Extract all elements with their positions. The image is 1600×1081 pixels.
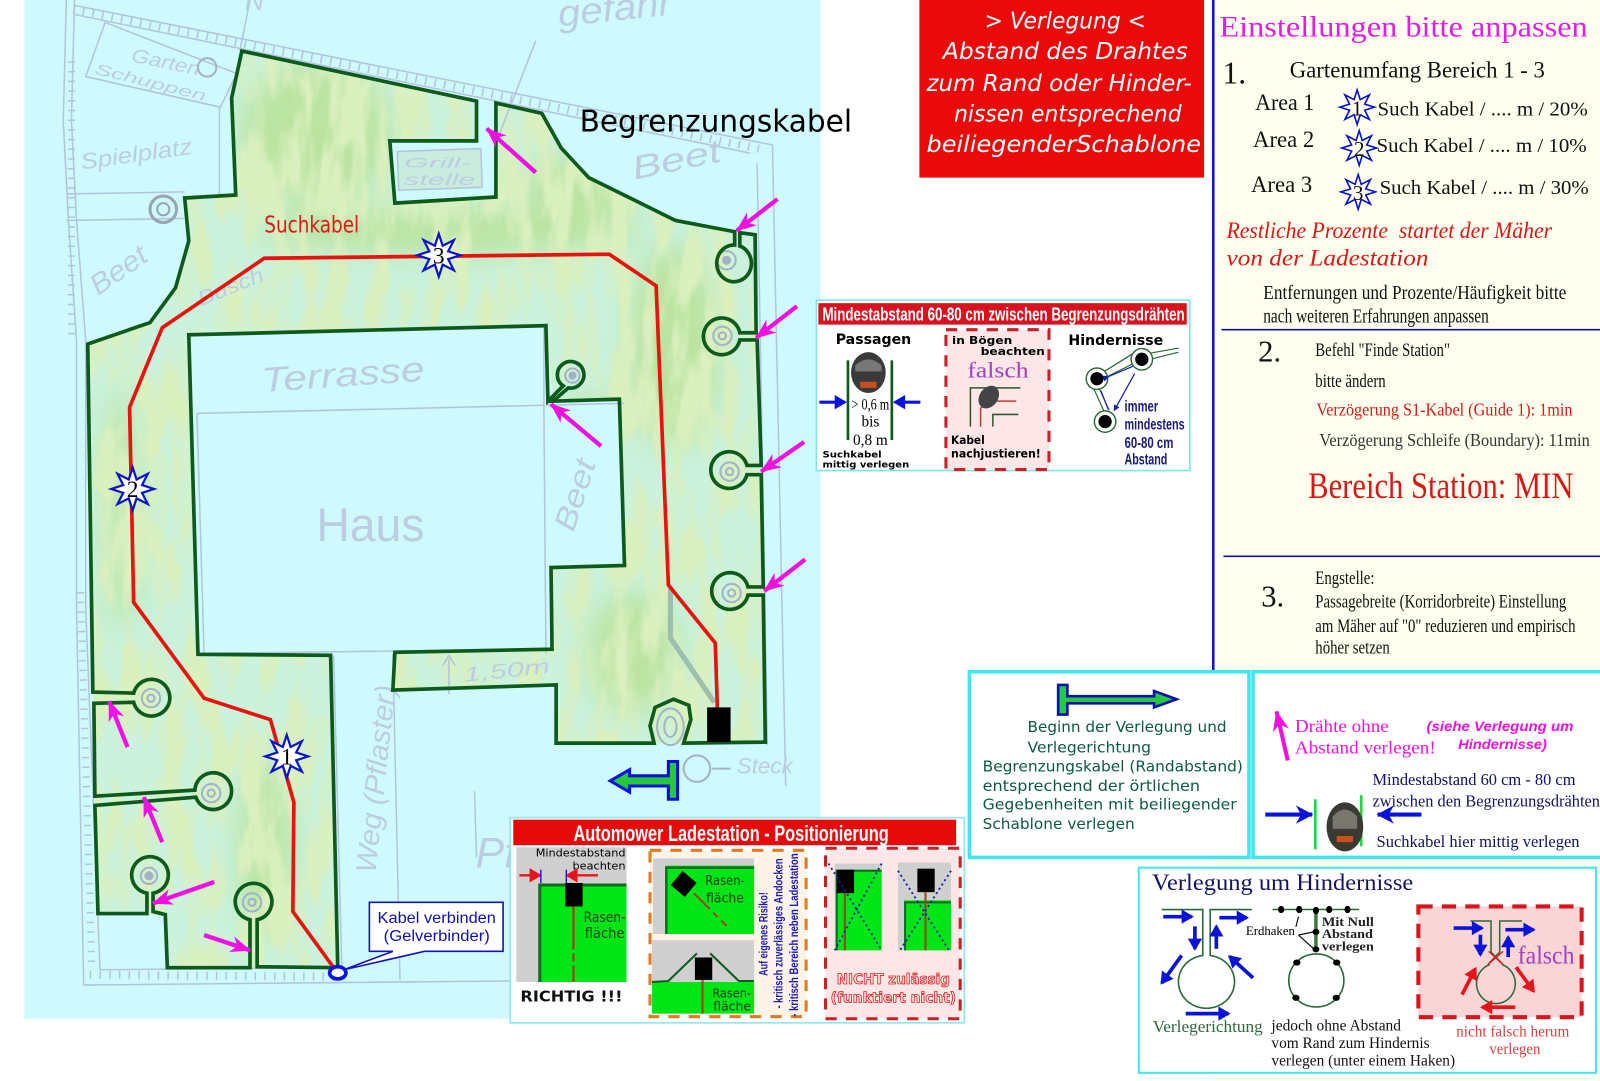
diagram: earth hooks: Mit Null bbox=[1322, 915, 1375, 929]
guide wire in grey bbox=[670, 588, 714, 702]
column: curves wrong bbox=[946, 330, 1049, 470]
instruction text: Verlegerichtung bbox=[1028, 739, 1151, 756]
callout: laying instructions red: beiliegenderSchablone bbox=[927, 130, 1201, 158]
step 1: Area 3 bbox=[1251, 172, 1312, 198]
pencil sketch lines bbox=[63, 0, 786, 985]
charging station bbox=[707, 707, 731, 742]
column: passages bbox=[819, 332, 920, 471]
instruction text: Begrenzungskabel (Randabstand) bbox=[983, 759, 1243, 776]
example: not allowed: (funktiert nicht) bbox=[831, 990, 956, 1006]
diagram: correct direction: Verlegerichtung bbox=[1153, 1017, 1263, 1036]
note: distances: nach weiteren Erfahrungen anpassen bbox=[1263, 306, 1489, 328]
diagram: correct direction bbox=[1153, 910, 1263, 1036]
diagram: wrong direction: nicht falsch herum bbox=[1456, 1024, 1569, 1041]
column: passages: mittig verlegen bbox=[822, 460, 909, 471]
title: settings: Einstellungen bitte anpassen bbox=[1219, 12, 1588, 44]
column: passages: Suchkabel bbox=[822, 449, 882, 460]
callout: laying instructions red: zum Rand oder Hinder- bbox=[926, 69, 1192, 97]
callout: laying instructions red: nissen entsprechend bbox=[954, 99, 1182, 127]
magenta note: (siehe Verlegung um bbox=[1427, 719, 1574, 735]
column: obstacles: immer bbox=[1124, 398, 1158, 415]
panel: garden plan bbox=[24, 0, 852, 1019]
panel: start of laying bbox=[969, 672, 1249, 857]
sketch labels: Beet bbox=[548, 453, 603, 535]
column: passages: Passagen bbox=[836, 332, 911, 348]
example: at own risk: - kritisch Bereich neben Ladestation bbox=[787, 853, 801, 1017]
star 1: 1 bbox=[281, 745, 293, 771]
column: curves wrong: Kabel bbox=[951, 434, 985, 447]
magenta note: Abstand verlegen! bbox=[1295, 737, 1436, 757]
step 1: Area 1 bbox=[1255, 90, 1314, 116]
sketch labels bbox=[79, 0, 795, 878]
icon: start arrow left bbox=[610, 761, 678, 799]
sketch labels: Busch bbox=[195, 264, 267, 311]
boundary wire bbox=[88, 51, 765, 968]
instruction text bbox=[983, 719, 1243, 833]
diagram: earth hooks: verlegen (unter einem Haken) bbox=[1271, 1053, 1455, 1070]
sketch labels: stelle bbox=[404, 172, 476, 189]
diagram: wrong direction: verlegen bbox=[1489, 1041, 1541, 1058]
column: curves wrong: falsch bbox=[967, 358, 1029, 383]
diagram: earth hooks: verlegen bbox=[1322, 939, 1374, 953]
column: obstacles: Abstand bbox=[1124, 451, 1167, 468]
example: correct: fläche bbox=[585, 926, 625, 942]
column: obstacles: 60-80 cm bbox=[1124, 435, 1173, 452]
magenta arrow bbox=[1277, 711, 1288, 760]
example: correct bbox=[516, 847, 627, 1005]
star legend 3 bbox=[1341, 175, 1376, 209]
banner: Mindestabstand 60-80 cm zwischen Begrenzungsdrähten bbox=[822, 304, 1185, 325]
sketch labels: Haus bbox=[316, 499, 424, 551]
mower diagram bbox=[1265, 795, 1421, 851]
step 1: Such Kabel / .... m / 20% bbox=[1378, 98, 1588, 120]
step 1: Gartenumfang Bereich 1 - 3 bbox=[1290, 58, 1545, 84]
instruction text: Schablone verlegen bbox=[983, 816, 1135, 833]
step 1: Area 2 bbox=[1253, 127, 1314, 153]
minimum distance text: Suchkabel hier mittig verlegen bbox=[1377, 832, 1580, 851]
instruction text: entsprechend der örtlichen bbox=[983, 778, 1200, 795]
magenta note: Drähte ohne bbox=[1295, 716, 1389, 736]
heading: boundary wire: Begrenzungskabel bbox=[580, 105, 852, 140]
step 2: Verzögerung S1-Kabel (Guide 1): 1min bbox=[1316, 399, 1572, 420]
sketch labels: Steck bbox=[737, 754, 795, 779]
example: at own risk bbox=[650, 850, 806, 1017]
red note bbox=[1226, 218, 1552, 270]
magenta note bbox=[1295, 716, 1574, 757]
sketch labels: Spielplatz bbox=[79, 134, 193, 174]
sketch labels: Grill- bbox=[404, 155, 472, 171]
step 2: 2. bbox=[1258, 334, 1281, 368]
step 1: 1. bbox=[1222, 56, 1246, 91]
star legend 3: 3 bbox=[1353, 181, 1364, 205]
example: correct: Mindestabstand bbox=[536, 848, 626, 859]
sketch labels: Garten bbox=[130, 45, 202, 81]
diagram: earth hooks: jedoch ohne Abstand bbox=[1270, 1018, 1401, 1035]
column: obstacles bbox=[1068, 333, 1185, 468]
sketch labels: Beet bbox=[84, 239, 155, 302]
panel: laying around obstacles bbox=[1139, 868, 1596, 1073]
callout: connect cable bbox=[344, 902, 503, 970]
column: passages: bis bbox=[861, 414, 879, 431]
example: not allowed bbox=[826, 848, 960, 1019]
minimum distance text: zwischen den Begrenzungsdrähten bbox=[1372, 791, 1600, 810]
star 2: 2 bbox=[127, 477, 139, 503]
callout: connect cable: Kabel verbinden bbox=[378, 910, 496, 927]
example: not allowed: NICHT zulässig bbox=[837, 972, 950, 988]
column: obstacles: Hindernisse bbox=[1068, 333, 1163, 349]
callout: laying instructions red: Abstand des Drahtes bbox=[941, 37, 1188, 65]
sketch labels: Terrasse bbox=[260, 351, 426, 400]
sketch labels: Weg (Pflaster) bbox=[351, 683, 402, 875]
star legend 2 bbox=[1342, 131, 1377, 165]
column: passages: 0,8 m bbox=[853, 432, 888, 449]
callout: laying instructions red: > Verlegung < bbox=[985, 7, 1146, 35]
diagram: earth hooks: Erdhaken bbox=[1246, 924, 1295, 938]
heading: Verlegung um Hindernisse bbox=[1152, 870, 1413, 896]
icon: start arrow right bbox=[1058, 685, 1177, 715]
banner: Automower Ladestation - Positionierung bbox=[573, 821, 889, 846]
red note: Restliche Prozente startet der Mäher bbox=[1226, 218, 1552, 243]
instruction text: Gegebenheiten mit beiliegender bbox=[983, 796, 1238, 813]
tree and socket sketches bbox=[141, 58, 741, 912]
example: correct: Rasen- bbox=[584, 910, 626, 926]
step 1: Such Kabel / .... m / 30% bbox=[1380, 177, 1589, 199]
column: curves wrong: beachten bbox=[981, 345, 1045, 358]
sketch labels: Beet bbox=[628, 131, 726, 187]
column: passages: > 0,6 m bbox=[852, 396, 889, 413]
column: curves wrong: in Bögen bbox=[952, 334, 1012, 347]
diagram: earth hooks bbox=[1246, 906, 1455, 1070]
panel: minimum distance bbox=[816, 300, 1190, 471]
connector ring bbox=[330, 967, 346, 979]
step 2 bbox=[1258, 334, 1590, 506]
star 3: 3 bbox=[433, 243, 445, 269]
star 3 bbox=[417, 234, 460, 277]
star legend 1 bbox=[1340, 90, 1374, 125]
panel: settings background bbox=[1213, 0, 1600, 1081]
star 2 bbox=[111, 468, 154, 510]
callout: connect cable: (Gelverbinder) bbox=[384, 928, 490, 945]
diagram: earth hooks: Abstand bbox=[1322, 927, 1373, 941]
star legend 1: 1 bbox=[1352, 96, 1363, 120]
example: at own risk: Auf eigenes Risiko! bbox=[756, 892, 770, 976]
star legend 2: 2 bbox=[1354, 137, 1365, 161]
sketch labels: Pf bbox=[476, 830, 520, 878]
search cable bbox=[130, 254, 717, 968]
panel: wires without gap bbox=[1253, 672, 1600, 857]
sketch labels: Schuppen bbox=[93, 61, 208, 105]
diagram: wrong direction bbox=[1418, 906, 1582, 1058]
minimum distance text: Mindestabstand 60 cm - 80 cm bbox=[1372, 770, 1576, 789]
step 3: 3. bbox=[1261, 579, 1284, 613]
note: distances bbox=[1263, 282, 1566, 328]
step 3: höher setzen bbox=[1315, 637, 1390, 658]
step 3 bbox=[1261, 568, 1576, 658]
step 2: bitte ändern bbox=[1315, 371, 1386, 392]
heading: search cable: Suchkabel bbox=[264, 211, 359, 239]
column: curves wrong: nachjustieren! bbox=[951, 447, 1041, 460]
example: at own risk: Rasen- bbox=[712, 986, 751, 1000]
instruction text: Beginn der Verlegung und bbox=[1028, 719, 1227, 736]
step 3: Engstelle: bbox=[1315, 568, 1374, 589]
step 1: Such Kabel / .... m / 10% bbox=[1377, 135, 1587, 157]
step 2: Befehl "Finde Station" bbox=[1315, 340, 1450, 361]
lawn area bbox=[88, 51, 765, 968]
callout: laying instructions red bbox=[919, 0, 1204, 178]
example: at own risk: fläche bbox=[713, 1000, 751, 1014]
minimum distance text bbox=[1372, 770, 1600, 851]
red note: von der Ladestation bbox=[1227, 245, 1429, 270]
column: obstacles: mindestens bbox=[1124, 417, 1185, 434]
step 1 bbox=[1222, 56, 1589, 209]
star 1 bbox=[265, 735, 308, 778]
example: at own risk: - kritisch zuverlässiges Andocken bbox=[772, 858, 786, 1009]
diagram: earth hooks: vom Rand zum Hindernis bbox=[1271, 1035, 1430, 1052]
magenta arrows bbox=[109, 129, 805, 950]
example: at own risk: Rasen- bbox=[705, 874, 745, 889]
example: at own risk: fläche bbox=[706, 891, 744, 906]
diagram: wrong direction: falsch bbox=[1518, 941, 1575, 970]
magenta note: Hindernisse) bbox=[1458, 737, 1547, 753]
example: correct: RICHTIG !!! bbox=[520, 987, 622, 1005]
example: correct: beachten bbox=[572, 862, 626, 873]
sketch labels: 1,50m bbox=[463, 656, 551, 687]
panel: charging station positioning bbox=[510, 818, 964, 1023]
